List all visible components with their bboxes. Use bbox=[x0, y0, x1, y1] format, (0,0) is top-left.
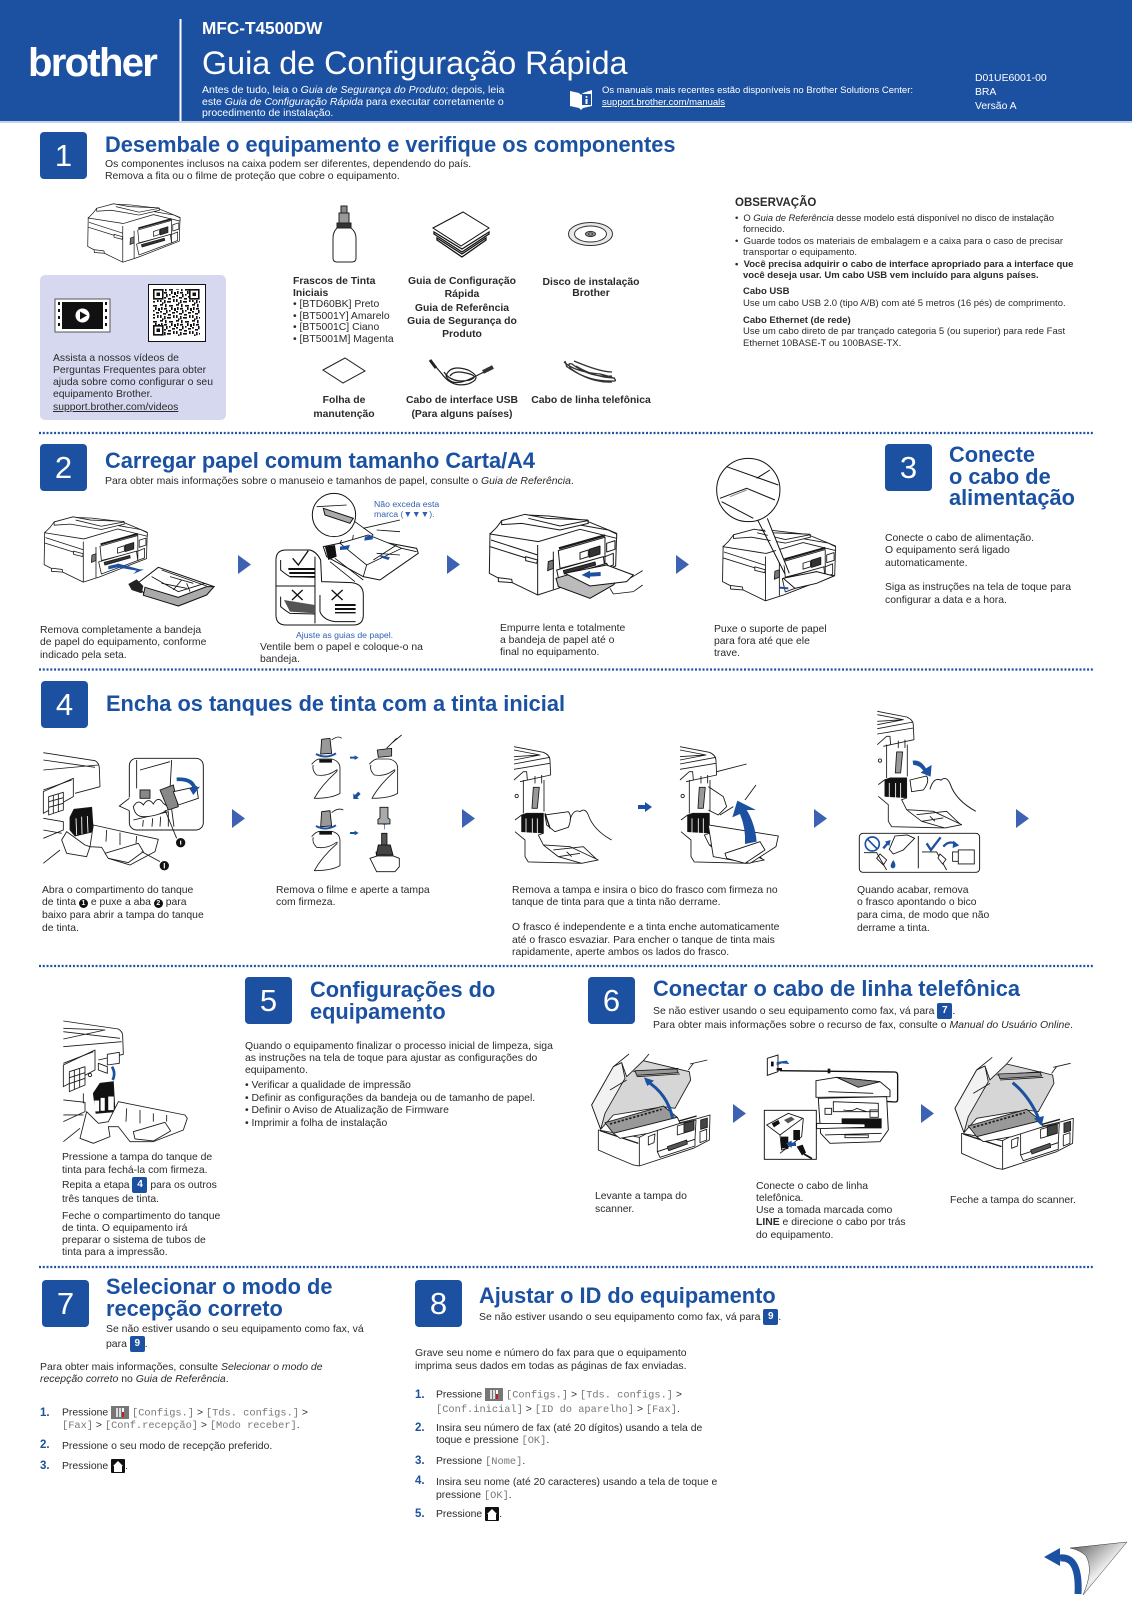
ink bottles label: Frascos de Tinta bbox=[293, 276, 375, 287]
step 3 text: Conecte o cabo de alimentação. bbox=[885, 533, 1034, 544]
header divider bbox=[180, 19, 182, 121]
step 7 intro bbox=[40, 1362, 323, 1384]
step 5 side caption bbox=[62, 1152, 220, 1258]
document id: Versão A bbox=[975, 100, 1017, 112]
step 8 list item 2: Insira seu número de fax (até 20 dígitos) usando a tela de bbox=[436, 1422, 702, 1434]
usb label: (Para alguns países) bbox=[411, 409, 513, 420]
step 1 intro: Os componentes inclusos na caixa podem ser diferentes, dependendo do país. bbox=[105, 159, 471, 170]
step 5 text: Quando o equipamento finalizar o processo inicial de limpeza, siga bbox=[245, 1040, 553, 1052]
blue note guides: Ajuste as guias de papel. bbox=[296, 630, 393, 640]
step 4 caption b bbox=[276, 884, 430, 908]
step 8 intro: Grave seu nome e número do fax para que o equipamento bbox=[415, 1348, 687, 1358]
step 6 caption b: Conecte o cabo de linha bbox=[756, 1180, 868, 1192]
illustration: pull paper support bbox=[717, 458, 836, 601]
note bullets: você deseja usar. Um cabo USB vem incluído para alguns países. bbox=[743, 270, 1039, 281]
illustration: connect phone line bbox=[764, 1055, 898, 1159]
step 5 list: • Definir as configurações da bandeja ou de tamanho de papel. bbox=[245, 1093, 535, 1104]
step 5 side caption: preparar o sistema de tubos de bbox=[62, 1234, 206, 1246]
step 2 caption d: para fora até que ele bbox=[714, 636, 810, 647]
step 8 intro: imprima seus dados em todas as páginas de fax enviadas. bbox=[415, 1360, 687, 1372]
videos text: ajuda sobre como configurar o seu bbox=[53, 377, 213, 388]
intro text bbox=[202, 84, 504, 119]
arrow: next sub-step bbox=[638, 802, 652, 812]
step 4 badge bbox=[41, 681, 88, 728]
usb label bbox=[406, 395, 518, 420]
guides label: Guia de Configuração bbox=[408, 276, 516, 287]
step 8 list item 3: Pressione [Nome]. bbox=[436, 1456, 525, 1468]
illustration: squeeze bottle and lift bbox=[680, 747, 778, 863]
step 6 heading: Conectar o cabo de linha telefônica bbox=[653, 976, 1020, 1001]
step 6 intro bbox=[653, 1003, 1073, 1030]
step 4 caption d: Quando acabar, remova bbox=[857, 884, 968, 896]
model name: MFC-T4500DW bbox=[202, 18, 322, 38]
header banner bbox=[0, 0, 1132, 123]
divider 1 bbox=[39, 432, 1093, 434]
step 3 badge: 3 bbox=[900, 450, 917, 485]
step 5 side caption: de tinta. O equipamento irá bbox=[62, 1222, 187, 1234]
step 2 badge: 2 bbox=[55, 450, 72, 485]
step 4 caption a bbox=[42, 884, 204, 934]
step 6 caption b: Use a tomada marcada como bbox=[756, 1205, 892, 1216]
step 5 side caption: Pressione a tampa do tanque de bbox=[62, 1152, 212, 1163]
step 4 badge: 4 bbox=[56, 687, 73, 722]
illustration: raise scanner cover bbox=[592, 1054, 710, 1166]
ink bottles label: Iniciais bbox=[293, 288, 328, 298]
illustration: printer with components bbox=[88, 204, 180, 262]
illustration: insert bottle into tank bbox=[514, 747, 612, 863]
step 7 numbers: 2. 3. bbox=[40, 1439, 50, 1472]
guides label: Produto bbox=[442, 329, 482, 340]
disc label: Disco de instalação bbox=[542, 277, 640, 288]
usb cable note: Cabo USB bbox=[743, 286, 789, 297]
step 6 caption b: do equipamento. bbox=[756, 1230, 833, 1241]
sheet label: Folha de bbox=[323, 395, 365, 406]
step 6 caption a: scanner. bbox=[595, 1204, 634, 1214]
step 8 numbers: 1. 2. 3. 4. 5. bbox=[415, 1389, 425, 1520]
step 7 list item 1: Pressione [Configs.] > [Tds. configs.] > bbox=[62, 1407, 308, 1419]
step 8 note bbox=[479, 1309, 781, 1325]
step 4 caption a: 1 bbox=[82, 900, 85, 907]
blue note max mark: Não exceda esta bbox=[374, 498, 439, 508]
manuals notice bbox=[602, 85, 913, 108]
step 3 text bbox=[885, 533, 1072, 606]
ethernet note bbox=[743, 315, 1066, 349]
step 3 heading bbox=[949, 442, 1075, 510]
step 4 caption d bbox=[857, 884, 989, 934]
usb cable note bbox=[743, 286, 1066, 309]
step 2 caption c: Empurre lenta e totalmente bbox=[500, 622, 625, 634]
step 5 text: equipamento. bbox=[245, 1064, 308, 1076]
step 2 badge bbox=[40, 444, 87, 491]
ethernet note: Ethernet 10BASE-T ou 100BASE-TX. bbox=[743, 338, 901, 349]
intro text: procedimento de instalação. bbox=[202, 107, 333, 119]
step 1 intro bbox=[105, 159, 471, 182]
step 7 note bbox=[106, 1324, 364, 1352]
guides label: Guia de Segurança do bbox=[407, 316, 517, 327]
step 4 caption d: derrame a tinta. bbox=[857, 923, 930, 934]
manuals notice: Os manuais mais recentes estão disponíveis no Brother Solutions Center: bbox=[602, 85, 913, 96]
disc label bbox=[542, 277, 640, 299]
step 5 text: as instruções na tela de toque para ajustar as configurações do bbox=[245, 1052, 537, 1064]
sheet label: manutenção bbox=[313, 409, 375, 420]
step 8 list item 5: Pressione . bbox=[436, 1509, 502, 1520]
step 5 text bbox=[245, 1040, 553, 1076]
step 2 intro: Para obter mais informações sobre o manuseio e tamanhos de papel, consulte o Guia de Referência. bbox=[105, 476, 574, 487]
brother logo: brother bbox=[28, 41, 156, 85]
disc label: Brother bbox=[572, 288, 610, 299]
step 8 list item 2 bbox=[436, 1422, 702, 1447]
step 6 caption c: Feche a tampa do scanner. bbox=[950, 1194, 1076, 1206]
step 7 numbers: 1. bbox=[40, 1407, 50, 1419]
step 4 caption c: Remova a tampa e insira o bico do frasco com firmeza no bbox=[512, 884, 778, 896]
videos text: Assista a nossos vídeos de bbox=[53, 352, 179, 364]
step 3 heading: alimentação bbox=[949, 485, 1075, 510]
arrows step 2 bbox=[238, 555, 689, 574]
ink bottles label bbox=[293, 276, 394, 344]
step 2 caption b: Ventile bem o papel e coloque-o na bbox=[260, 642, 423, 652]
step 4 caption a: de tinta. bbox=[42, 923, 79, 934]
step 4 caption c bbox=[512, 884, 779, 958]
step 6 intro: Para obter mais informações sobre o recurso de fax, consulte o Manual do Usuário Online. bbox=[653, 1020, 1073, 1030]
step 4 caption b: com firmeza. bbox=[276, 897, 335, 908]
step 5 side caption: tinta para a impressão. bbox=[62, 1246, 168, 1258]
arrows step 4 bbox=[232, 809, 1029, 828]
step 8 list item 4: pressione [OK]. bbox=[436, 1490, 512, 1502]
step 7 numbers bbox=[40, 1407, 50, 1472]
step 2 heading: Carregar papel comum tamanho Carta/A4 bbox=[105, 448, 535, 473]
phone cable label: Cabo de linha telefônica bbox=[531, 395, 651, 406]
step 8 note: 9 bbox=[768, 1311, 774, 1322]
icon: printed guides bbox=[433, 212, 489, 257]
note heading: OBSERVAÇÃO bbox=[735, 197, 816, 209]
note bullets: • Você precisa adquirir o cabo de interface apropriado para a interface que bbox=[735, 259, 1073, 270]
step 6 intro: Se não estiver usando o seu equipamento como fax, vá para . bbox=[653, 1005, 955, 1016]
illustration: push tray in bbox=[489, 514, 643, 598]
step 2 caption a: indicado pela seta. bbox=[40, 650, 127, 661]
panel: FAQ videos bbox=[40, 275, 226, 420]
step 7 list item 2: Pressione o seu modo de recepção preferido. bbox=[62, 1441, 272, 1452]
note bullets: transportar o equipamento. bbox=[743, 247, 857, 258]
step 5 side caption: três tanques de tinta. bbox=[62, 1194, 159, 1205]
step 6 caption a bbox=[595, 1190, 687, 1214]
videos text: support.brother.com/videos bbox=[53, 402, 178, 413]
step 4 caption c: O frasco é independente e a tinta enche automaticamente bbox=[512, 922, 779, 933]
step 1 intro: Remova a fita ou o filme de proteção que cobre o equipamento. bbox=[105, 171, 400, 182]
videos text: equipamento Brother. bbox=[53, 389, 152, 400]
step 3 badge bbox=[885, 444, 932, 491]
step 4 caption c: até o frasco esvaziar. Para encher o tanque de tinta mais bbox=[512, 934, 775, 946]
QR code bbox=[148, 284, 206, 342]
step 5 list: • Definir o Aviso de Atualização de Firmware bbox=[245, 1105, 449, 1116]
step 4 caption d: o frasco apontando o bico bbox=[857, 897, 977, 908]
sheet label bbox=[313, 395, 375, 420]
step 3 text: automaticamente. Siga as instruções na tela de toque para bbox=[885, 558, 1071, 593]
step 1 heading: Desembale o equipamento e verifique os componentes bbox=[105, 132, 676, 157]
step 6 caption b: LINE e direcione o cabo por trás bbox=[756, 1217, 906, 1228]
step 4 caption a: 2 bbox=[156, 900, 160, 907]
icon: manual book bbox=[570, 90, 592, 110]
step 5 heading bbox=[310, 977, 495, 1024]
step 5 badge: 5 bbox=[260, 983, 277, 1018]
illustration: close ink tank cover bbox=[63, 1021, 187, 1143]
step 7 list item 3: Pressione . bbox=[62, 1461, 128, 1472]
illustration: fan and load paper bbox=[276, 493, 418, 625]
step 7 note: para . bbox=[106, 1338, 148, 1349]
step 3 text: configurar a data e a hora. bbox=[885, 595, 1007, 606]
note bullets: fornecido. bbox=[743, 224, 785, 235]
step 2 caption a: Remova completamente a bandeja bbox=[40, 625, 201, 636]
step 8 list item 4: Insira seu nome (até 20 caracteres) usando a tela de toque e bbox=[436, 1476, 717, 1488]
document id: BRA bbox=[975, 86, 996, 98]
step 2 caption d bbox=[714, 624, 827, 659]
divider 4 bbox=[39, 1266, 1093, 1268]
step 2 caption c bbox=[500, 622, 625, 658]
step 8 list item 4 bbox=[436, 1476, 717, 1502]
ethernet note: Use um cabo direto de par trançado categoria 5 (ou superior) para rede Fast bbox=[743, 326, 1065, 337]
guides label bbox=[407, 276, 517, 340]
step 1 badge bbox=[40, 132, 87, 179]
step 7 list item 1 bbox=[62, 1406, 308, 1432]
step 3 heading: o cabo de bbox=[949, 464, 1051, 489]
main title: Guia de Configuração Rápida bbox=[202, 45, 628, 81]
icon: USB cable bbox=[430, 360, 493, 385]
step 4 heading: Encha os tanques de tinta com a tinta inicial bbox=[106, 691, 565, 716]
step 7 intro: Para obter mais informações, consulte Selecionar o modo de bbox=[40, 1362, 323, 1372]
step 5 side caption: tinta para fechá-la com firmeza. bbox=[62, 1165, 208, 1176]
step 8 list item 1 bbox=[436, 1388, 682, 1417]
step 1 badge: 1 bbox=[55, 138, 72, 173]
step 5 heading: Configurações do bbox=[310, 977, 495, 1002]
guides label: Rápida bbox=[445, 289, 479, 300]
ink bottles label: • [BT5001Y] Amarelo bbox=[293, 310, 390, 322]
step 8 badge: 8 bbox=[430, 1286, 447, 1321]
step 8 list item 2: toque e pressione [OK]. bbox=[436, 1435, 549, 1447]
note bullets: • O Guia de Referência desse modelo está disponível no disco de instalação bbox=[735, 212, 1054, 224]
note bullets bbox=[735, 212, 1074, 281]
icon: back arrow bbox=[1044, 1548, 1078, 1594]
step 2 caption a: de papel do equipamento, conforme bbox=[40, 637, 206, 648]
ethernet note: Cabo Ethernet (de rede) bbox=[743, 315, 851, 326]
step 5 side caption: 4 bbox=[137, 1179, 143, 1190]
step 5 list: • Imprimir a folha de instalação bbox=[245, 1118, 387, 1129]
ink bottles label: • [BT5001M] Magenta bbox=[293, 334, 394, 344]
step 7 intro: recepção correto no Guia de Referência. bbox=[40, 1374, 229, 1384]
step 7 badge: 7 bbox=[57, 1286, 74, 1321]
illustration: remove paper tray bbox=[44, 517, 214, 606]
step 8 badge bbox=[415, 1280, 462, 1327]
step 7 heading: recepção correto bbox=[106, 1296, 283, 1321]
step 3 heading: Conecte bbox=[949, 442, 1035, 467]
intro text: este Guia de Configuração Rápida para executar corretamente o bbox=[202, 96, 504, 108]
step 2 caption c: a bandeja de papel até o bbox=[500, 635, 614, 646]
step 8 intro bbox=[415, 1348, 687, 1372]
step 5 side caption: Repita a etapa para os outros bbox=[62, 1180, 217, 1191]
step 5 list bbox=[245, 1080, 535, 1129]
usb label: Cabo de interface USB bbox=[406, 395, 518, 406]
step 7 list item 1: [Fax] > [Conf.recepção] > [Modo receber]. bbox=[62, 1420, 300, 1432]
divider 2 bbox=[39, 668, 1093, 671]
videos text: Perguntas Frequentes para obter bbox=[53, 365, 206, 376]
step 7 note: Se não estiver usando o seu equipamento como fax, vá bbox=[106, 1324, 364, 1334]
step 2 caption b bbox=[260, 642, 423, 665]
ink bottles label: • [BTD60BK] Preto bbox=[293, 299, 379, 310]
ink bottles label: • [BT5001C] Ciano bbox=[293, 322, 379, 333]
icon: installation disc bbox=[568, 222, 612, 246]
step 4 caption d: para cima, de modo que não bbox=[857, 910, 989, 921]
step 6 intro: 7 bbox=[942, 1004, 948, 1016]
step 8 note: Se não estiver usando o seu equipamento como fax, vá para . bbox=[479, 1312, 781, 1323]
illustration: remove film and tighten cap bbox=[312, 735, 402, 872]
illustration: open ink tank cover bbox=[43, 753, 203, 870]
step 4 caption c: tanque de tinta para que a tinta não derrame. bbox=[512, 897, 721, 908]
step 6 caption b bbox=[756, 1180, 906, 1241]
step 6 caption b: telefônica. bbox=[756, 1193, 803, 1204]
arrows step 6 bbox=[733, 1104, 934, 1123]
icon: maintenance sheet bbox=[323, 358, 365, 383]
step 2 caption c: final no equipamento. bbox=[500, 647, 599, 658]
note bullets: • Guarde todos os materiais de embalagem e a caixa para o caso de precisar bbox=[735, 236, 1063, 247]
step 4 caption a: baixo para abrir a tampa do tanque bbox=[42, 910, 204, 921]
icon: phone cable bbox=[564, 361, 615, 382]
step 7 note: 9 bbox=[135, 1338, 140, 1348]
icon: video film bbox=[55, 299, 110, 332]
step 6 badge bbox=[588, 977, 635, 1024]
step 3 text: O equipamento será ligado bbox=[885, 545, 1010, 556]
blue note max mark bbox=[374, 498, 440, 519]
step 2 caption b: bandeja. bbox=[260, 654, 300, 665]
blue note max mark: marca (▼▼▼). bbox=[374, 509, 435, 519]
usb cable note: Use um cabo USB 2.0 (tipo A/B) com até 5 metros (16 pés) de comprimento. bbox=[743, 298, 1066, 309]
step 4 caption b: Remova o filme e aperte a tampa bbox=[276, 884, 430, 896]
step 7 badge bbox=[42, 1280, 89, 1327]
step 8 heading: Ajustar o ID do equipamento bbox=[479, 1283, 776, 1308]
step 5 badge bbox=[245, 977, 292, 1024]
step 7 heading bbox=[106, 1274, 332, 1321]
step 2 caption d: trave. bbox=[714, 648, 740, 659]
divider 3 bbox=[39, 965, 1093, 967]
step 2 caption a bbox=[40, 625, 206, 661]
step 4 caption a: Abra o compartimento do tanque bbox=[42, 884, 193, 896]
step 6 badge: 6 bbox=[603, 983, 620, 1018]
step 5 heading: equipamento bbox=[310, 999, 446, 1024]
step 8 list item 1: Pressione [Configs.] > [Tds. configs.] > bbox=[436, 1389, 682, 1401]
step 2 caption d: Puxe o suporte de papel bbox=[714, 624, 827, 634]
videos text bbox=[53, 352, 213, 413]
step 7 heading: Selecionar o modo de bbox=[106, 1274, 332, 1299]
illustration: remove bottle upright bbox=[859, 711, 980, 872]
step 5 list: • Verificar a qualidade de impressão bbox=[245, 1080, 411, 1091]
step 4 caption a: de tinta e puxe a aba para bbox=[42, 897, 187, 908]
icon: ink bottle bbox=[333, 206, 356, 262]
illustration: close scanner cover bbox=[955, 1057, 1073, 1169]
document id bbox=[975, 72, 1047, 112]
step 6 caption a: Levante a tampa do bbox=[595, 1190, 687, 1202]
guides label: Guia de Referência bbox=[415, 303, 509, 314]
document id: D01UE6001-00 bbox=[975, 72, 1047, 84]
step 5 side caption: Feche o compartimento do tanque bbox=[62, 1210, 220, 1222]
step 4 caption c: rapidamente, aperte ambos os lados do frasco. bbox=[512, 947, 729, 958]
manuals notice: support.brother.com/manuals bbox=[602, 97, 725, 108]
step 8 list item 1: [Conf.inicial] > [ID do aparelho] > [Fax]. bbox=[436, 1404, 680, 1416]
icon: page curl bbox=[1070, 1542, 1127, 1595]
intro text: Antes de tudo, leia o Guia de Segurança do Produto; depois, leia bbox=[202, 84, 504, 96]
